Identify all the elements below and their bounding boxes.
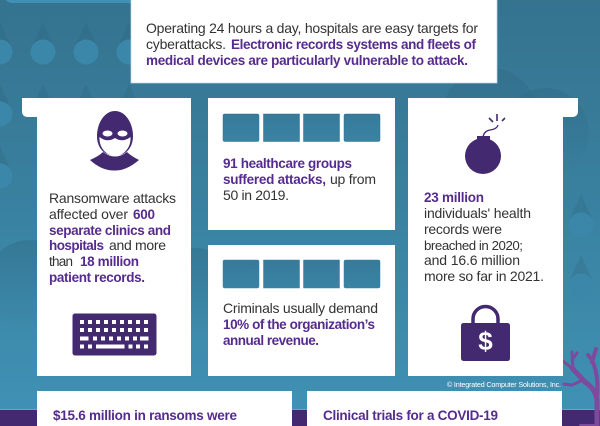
healthcare groups text: suffered attacks,	[223, 172, 326, 187]
panel: clinical trials	[307, 391, 562, 426]
panel: intro	[131, 0, 497, 83]
orange circle icon	[278, 0, 350, 10]
intro text: medical devices are particularly vulnerable to attack.	[146, 53, 468, 68]
records breached text: breached in 2020;	[424, 238, 523, 253]
healthcare groups text: up from	[330, 171, 376, 187]
stat tiles	[223, 114, 380, 142]
panel: healthcare groups	[208, 98, 395, 230]
records breached text	[424, 190, 544, 284]
records breached text: more so far in 2021.	[424, 268, 544, 284]
ransomware text: than	[49, 254, 73, 269]
ransomware text: 18 million	[80, 254, 139, 269]
icon: keyboard	[72, 314, 156, 356]
ransom demand text	[223, 300, 378, 348]
panel: records breached	[408, 98, 578, 376]
intro text: Operating 24 hours a day, hospitals are easy targets for	[146, 20, 478, 36]
ransom demand text: annual revenue.	[223, 333, 319, 348]
icon: padlock with dollar	[461, 306, 510, 361]
ransoms text: $15.6 million in ransoms were	[53, 408, 237, 423]
icon: hooded hacker	[90, 111, 139, 171]
ransomware text: 600	[133, 207, 155, 222]
purple ground band	[0, 409, 600, 426]
intro text: cyberattacks.	[146, 36, 226, 52]
records breached text: individuals' health	[424, 205, 531, 221]
ransom demand text: 10% of the organization’s	[223, 317, 375, 332]
ransomware text: patient records.	[49, 270, 145, 285]
panel: ransom demand	[208, 245, 395, 376]
ransom demand text: Criminals usually demand	[223, 300, 378, 316]
ransomware text	[49, 190, 176, 285]
records breached text: and 16.6 million	[424, 252, 520, 268]
icon: bare tree	[563, 349, 597, 426]
ransomware text: and more	[109, 237, 166, 253]
icon: padlock with dollar: $	[478, 326, 493, 356]
copyright: © Integrated Computer Solutions, Inc.	[447, 380, 561, 389]
healthcare groups text: 91 healthcare groups	[223, 156, 352, 171]
stat tiles	[223, 260, 380, 288]
ransomware text: Ransomware attacks	[49, 190, 176, 206]
raindrops	[0, 22, 594, 298]
records breached text: 23 million	[424, 190, 484, 205]
healthcare groups text: 50 in 2019.	[223, 187, 289, 203]
ransomware text: hospitals	[49, 238, 104, 253]
ransomware text: separate clinics and	[49, 223, 171, 238]
intro text: Electronic records systems and fleets of	[231, 37, 476, 52]
icon: bomb	[465, 114, 505, 174]
healthcare groups text	[223, 156, 376, 203]
records breached text: records were	[424, 221, 502, 237]
panel: ransomware	[22, 98, 191, 376]
ransomware text: affected over	[49, 206, 128, 222]
intro text	[146, 20, 478, 68]
panel: ransoms demanded	[37, 391, 292, 426]
clinical trials text: Clinical trials for a COVID-19	[323, 408, 498, 423]
